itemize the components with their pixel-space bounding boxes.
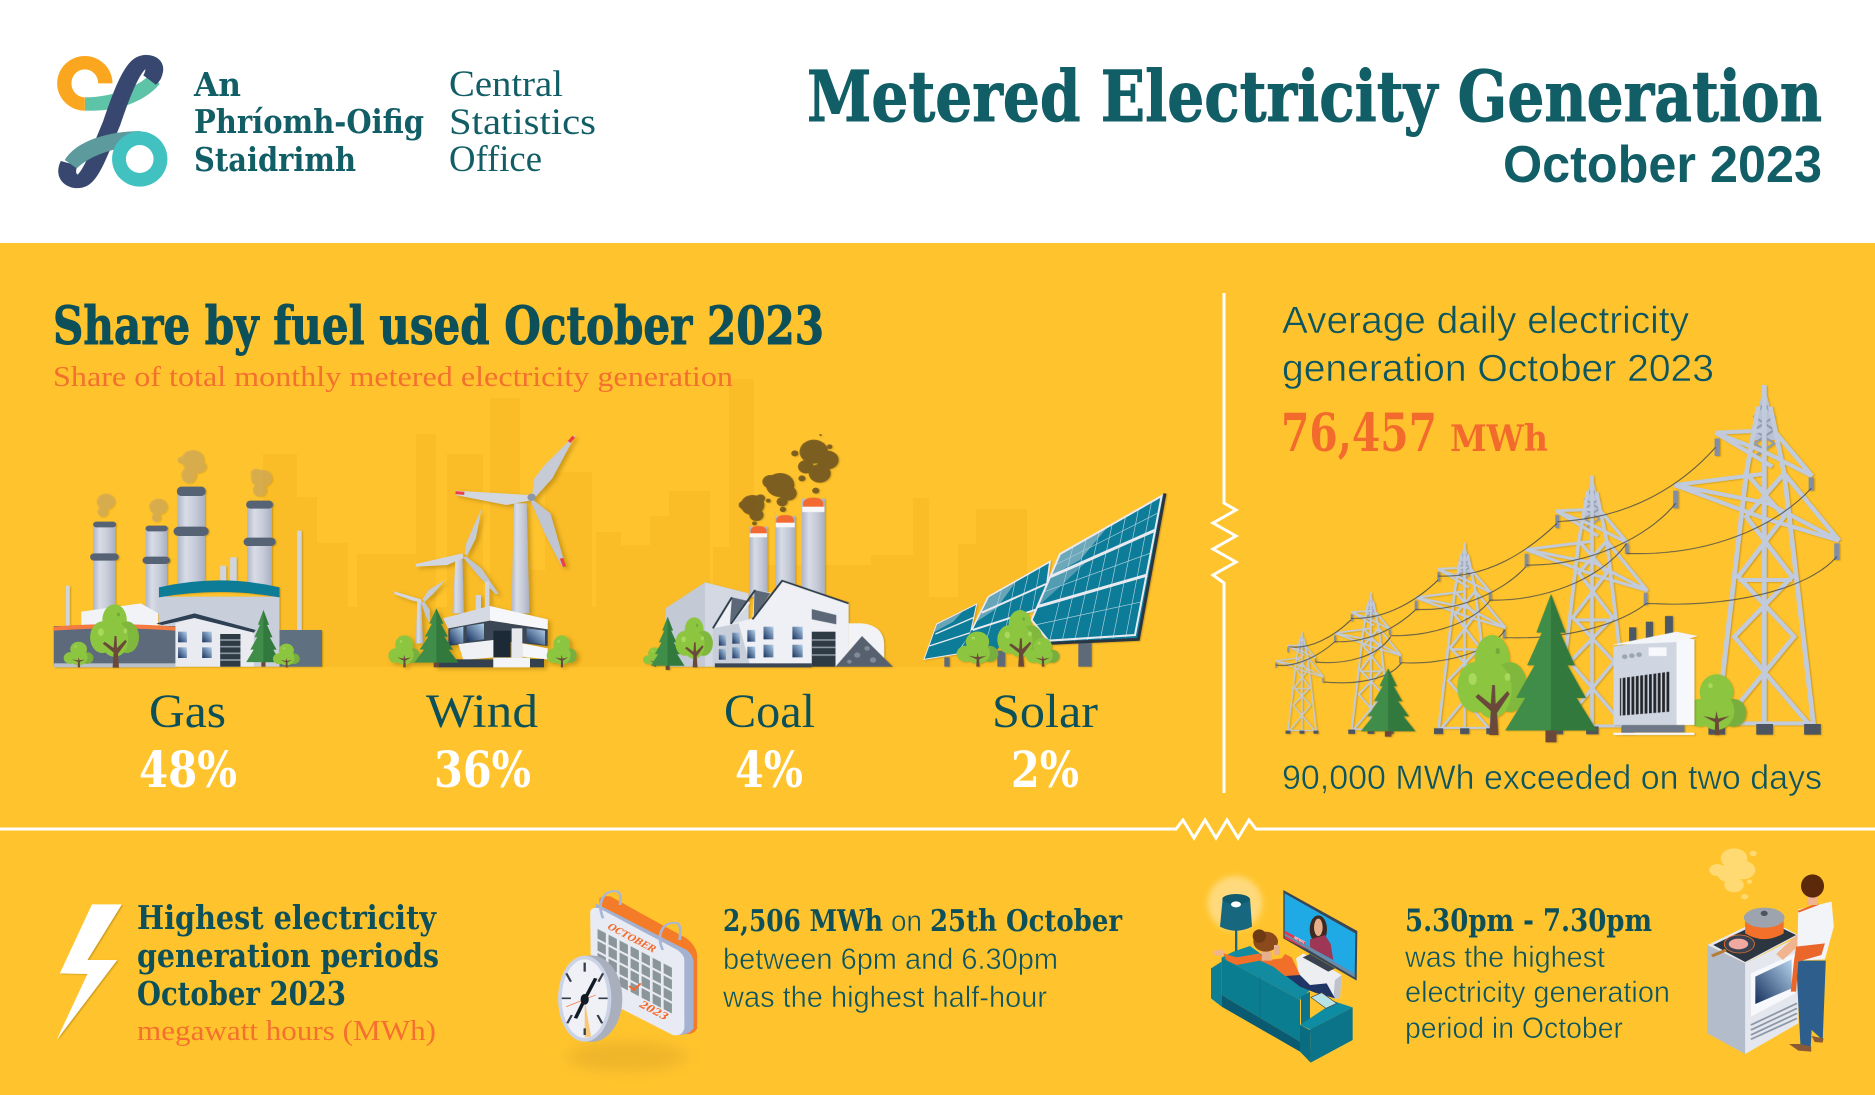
TV: NEWS <box>1293 935 1306 945</box>
heading: highest generation periods: generation periods <box>137 936 439 975</box>
coal buildings <box>665 581 893 667</box>
icon: coal plant <box>643 434 893 670</box>
solar trees <box>957 610 1059 667</box>
section heading: share by fuel: Share by fuel used October 2023 <box>53 296 824 357</box>
text: highest generation period: was the highest <box>1404 941 1606 974</box>
clock <box>558 955 622 1042</box>
steam <box>1709 848 1757 899</box>
pylon trees <box>1361 594 1746 742</box>
text: highest half-hour: on <box>891 905 922 938</box>
illustration: person cooking at stove <box>1707 848 1834 1054</box>
title: October 2023 <box>1503 136 1822 194</box>
icon: solar panels <box>924 493 1165 667</box>
logo text: English name: Central <box>449 64 563 105</box>
text: highest half-hour: 25th October <box>930 904 1123 939</box>
calendar: OCTOBER <box>604 922 659 955</box>
fuel label: solar: 2% <box>1011 740 1079 799</box>
section heading: share by fuel: Share of total monthly metered electricity generation <box>53 361 734 393</box>
fuel label: wind <box>426 685 538 799</box>
coal trees <box>643 617 713 670</box>
sofa and person <box>1211 929 1353 1063</box>
text: highest generation period: electricity generation <box>1405 976 1670 1009</box>
icon: wind farm <box>388 434 577 667</box>
logo text: English name: Office <box>449 139 542 180</box>
text: highest generation period: 5.30pm - 7.30pm <box>1405 903 1652 939</box>
coal chimneys <box>749 498 825 597</box>
fuel label: coal <box>724 685 815 799</box>
text: highest generation period <box>1404 903 1670 1045</box>
fuel label: solar <box>992 685 1098 799</box>
heading: highest generation periods: Highest electricity <box>137 898 437 937</box>
heading: highest generation periods: October 2023 <box>137 974 346 1013</box>
average daily generation text: MWh <box>1450 418 1548 460</box>
text: highest half-hour: 2,506 MWh <box>723 904 883 939</box>
wind control building <box>438 582 548 667</box>
gas plant smoke <box>97 450 272 522</box>
illustration: person watching TV <box>1208 876 1357 1063</box>
icon: gas plant <box>54 450 322 668</box>
calendar: 2023 <box>636 999 672 1022</box>
section heading: share by fuel <box>53 296 824 393</box>
pot and pan <box>1712 908 1785 956</box>
fuel label: gas <box>139 685 237 799</box>
lamp <box>1208 876 1262 955</box>
logo text: Irish name <box>193 65 424 179</box>
logo text: Irish name: Staidrimh <box>194 140 356 179</box>
illustration: pylons and transformer <box>1276 385 1839 742</box>
wind trees <box>388 608 577 667</box>
calendar <box>590 891 697 1035</box>
TV <box>1283 890 1357 998</box>
cook <box>1776 874 1834 1052</box>
gas plant buildings <box>54 580 322 667</box>
fuel label: wind: 36% <box>434 740 531 799</box>
stove <box>1707 917 1798 1054</box>
fuel label: solar: Solar <box>992 685 1098 738</box>
title <box>807 55 1822 194</box>
logo icon <box>57 56 167 187</box>
yellow background panel <box>0 243 1875 1095</box>
fuel label: coal: Coal <box>724 685 815 738</box>
average daily generation text: Average daily electricity <box>1282 300 1689 342</box>
transformer <box>1611 616 1698 735</box>
small solar panel <box>924 604 977 659</box>
logo text: Irish name: Phríomh-Oifig <box>194 102 424 141</box>
fuel label: wind: Wind <box>426 685 538 738</box>
medium solar panel <box>960 562 1050 651</box>
logo text: English name <box>449 64 596 180</box>
logo text: English name: Statistics <box>449 102 596 143</box>
gas plant trees <box>64 604 300 668</box>
divider lines with resistor zigzags <box>0 293 1875 838</box>
soft shadow <box>567 1042 687 1072</box>
logo text: Irish name: An <box>193 65 241 104</box>
coal smoke <box>739 434 839 525</box>
icon: calendar and clock <box>558 891 697 1072</box>
icon: lightning bolt <box>57 904 122 1040</box>
fuel label: coal: 4% <box>735 740 803 799</box>
large solar panel <box>1032 493 1165 643</box>
text: highest half-hour <box>722 904 1123 1014</box>
heading: highest generation periods <box>137 898 439 1047</box>
text: highest half-hour: was the highest half-hour <box>722 981 1047 1014</box>
panel legs <box>944 640 1092 667</box>
text: highest half-hour: between 6pm and 6.30pm <box>723 943 1058 976</box>
average daily generation text <box>1281 300 1714 464</box>
heading: highest generation periods: megawatt hours (MWh) <box>137 1015 436 1047</box>
gas plant chimneys <box>66 487 302 634</box>
turbines <box>394 434 576 643</box>
text: highest generation period: period in October <box>1405 1012 1623 1045</box>
power lines <box>1276 447 1837 683</box>
average daily generation text: generation October 2023 <box>1282 348 1714 390</box>
caption: 90,000 MWh: 90,000 MWh exceeded on two days <box>1282 759 1822 797</box>
average daily generation text: 76,457 <box>1281 403 1437 464</box>
skyline background <box>263 379 1027 667</box>
pylons <box>1276 385 1839 735</box>
fuel label: gas: Gas <box>149 685 226 738</box>
fuel label: gas: 48% <box>139 740 237 799</box>
